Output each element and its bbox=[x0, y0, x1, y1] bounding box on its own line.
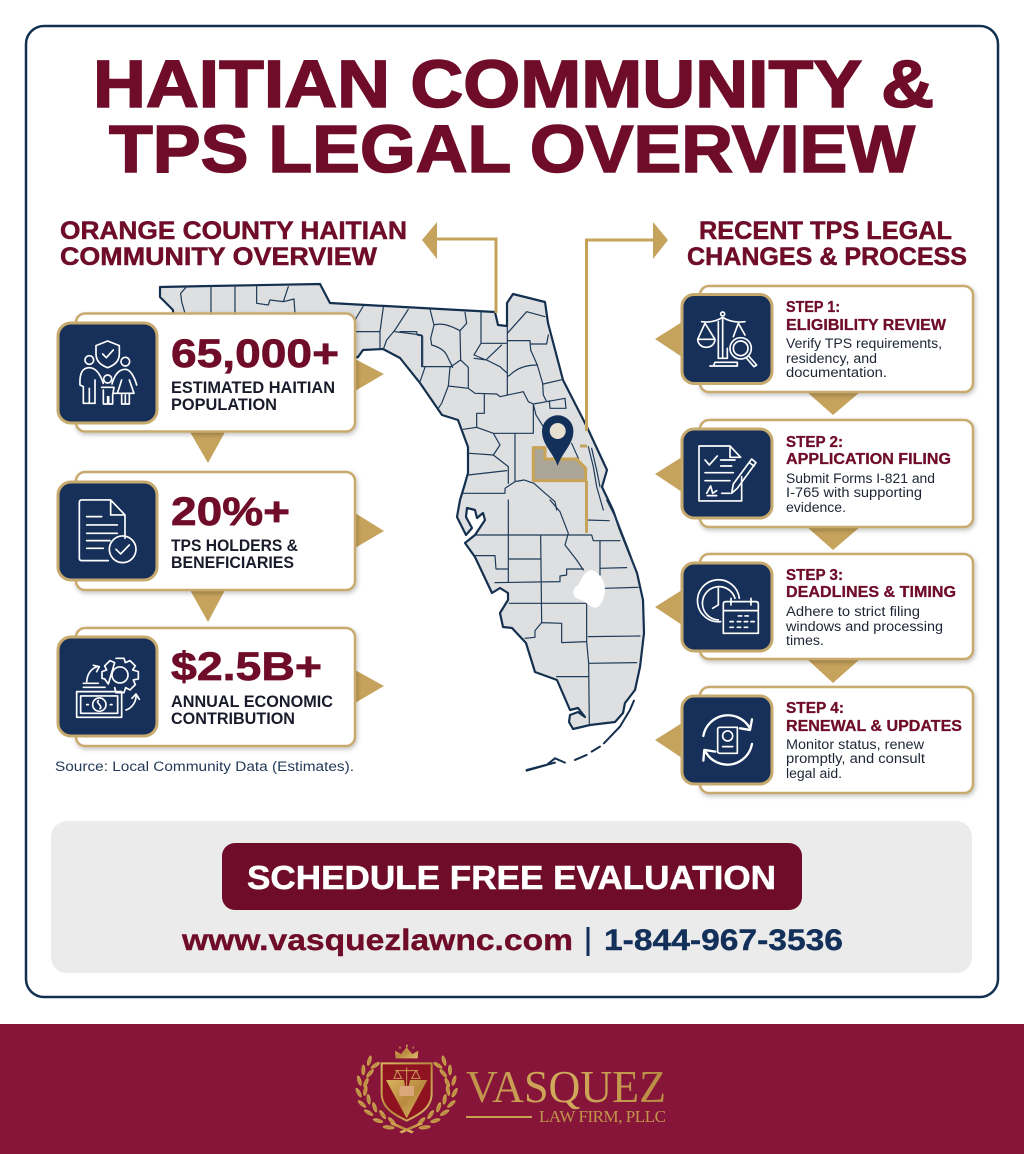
title bbox=[93, 47, 934, 187]
laurel left bbox=[354, 1055, 414, 1133]
logo subtitle: LAW FIRM, PLLC bbox=[539, 1107, 666, 1126]
connector arrow: left bbox=[422, 222, 496, 313]
icon tile bbox=[58, 637, 157, 736]
step description bbox=[786, 471, 935, 515]
card bbox=[700, 554, 973, 659]
icon: family with shield bbox=[80, 341, 137, 404]
contact line bbox=[181, 924, 843, 957]
heading: Orange County overview bbox=[60, 217, 407, 271]
step title: STEP 1: bbox=[786, 299, 840, 316]
panel: call to action bbox=[51, 821, 972, 973]
label: ANNUAL ECONOMIC bbox=[171, 693, 333, 711]
card bbox=[700, 687, 973, 793]
step title bbox=[786, 700, 962, 735]
icon tile bbox=[682, 696, 772, 784]
label: POPULATION bbox=[171, 396, 277, 414]
icon tile bbox=[58, 482, 157, 580]
step title: APPLICATION FILING bbox=[786, 451, 951, 468]
pointer arrow bbox=[655, 723, 682, 758]
value: 65,000+ bbox=[171, 332, 339, 376]
value: $2.5B+ bbox=[171, 645, 322, 689]
panel: step 4 bbox=[655, 687, 973, 793]
step title: STEP 2: bbox=[786, 434, 843, 451]
icon: money and gear bbox=[77, 658, 139, 717]
contact line: www.vasquezlawnc.com bbox=[181, 924, 573, 957]
icon: document with check bbox=[79, 500, 136, 563]
button bbox=[222, 843, 802, 910]
shield V and scales bbox=[386, 1067, 427, 1118]
icon: map pin bbox=[542, 415, 573, 466]
step description: evidence. bbox=[786, 500, 846, 515]
logo rule bbox=[466, 1116, 532, 1118]
heading: Orange County overview: COMMUNITY OVERVIEW bbox=[60, 243, 377, 271]
step title: DEADLINES & TIMING bbox=[786, 584, 956, 601]
south Florida county lines bbox=[475, 500, 640, 723]
step description bbox=[786, 737, 925, 781]
heading: Orange County overview: ORANGE COUNTY HAITIAN bbox=[60, 217, 407, 245]
panel: step 1 bbox=[655, 286, 973, 415]
pointer arrows bbox=[190, 359, 384, 463]
icon: scales and magnifier bbox=[698, 312, 757, 367]
icon tile bbox=[682, 294, 772, 384]
footer band bbox=[0, 1024, 1024, 1154]
card bbox=[76, 314, 355, 432]
card bbox=[76, 472, 355, 590]
source note: Source: Local Community Data (Estimates). bbox=[55, 759, 354, 774]
label bbox=[171, 693, 333, 728]
Florida Keys bbox=[527, 701, 634, 771]
pointer arrow bbox=[355, 670, 384, 703]
step title: STEP 4: bbox=[786, 700, 844, 717]
heading: Recent TPS changes: RECENT TPS LEGAL bbox=[699, 217, 952, 245]
label bbox=[171, 379, 335, 414]
panel: TPS holders stat bbox=[58, 472, 384, 622]
pointer arrows bbox=[655, 457, 860, 550]
panel: population stat bbox=[58, 314, 384, 463]
label bbox=[171, 537, 298, 572]
pointer arrows bbox=[655, 322, 860, 415]
step description: residency, and bbox=[786, 351, 877, 366]
contact line: 1-844-967-3536 bbox=[604, 924, 843, 957]
card bbox=[76, 628, 355, 746]
pointer arrows bbox=[655, 590, 860, 683]
step description: Submit Forms I-821 and bbox=[786, 471, 935, 486]
laurel right bbox=[399, 1055, 459, 1133]
step title: STEP 3: bbox=[786, 567, 843, 584]
step description: Verify TPS requirements, bbox=[786, 336, 942, 351]
map of Florida with county lines bbox=[160, 284, 644, 771]
step title: RENEWAL & UPDATES bbox=[786, 718, 962, 735]
card bbox=[700, 286, 973, 392]
panel: economic contribution stat bbox=[58, 628, 384, 746]
panel: step 2 bbox=[655, 420, 973, 550]
step description: Monitor status, renew bbox=[786, 737, 924, 752]
button: SCHEDULE FREE EVALUATION bbox=[247, 859, 776, 896]
step description: times. bbox=[786, 633, 824, 648]
step title bbox=[786, 567, 956, 601]
heading: Recent TPS changes: CHANGES & PROCESS bbox=[687, 243, 967, 271]
step description: I-765 with supporting bbox=[786, 485, 922, 500]
value: 20%+ bbox=[171, 490, 290, 534]
shield bbox=[382, 1063, 432, 1121]
Orange County highlight bbox=[533, 448, 586, 481]
label: ESTIMATED HAITIAN bbox=[171, 379, 335, 397]
logo wordmark: VASQUEZ bbox=[466, 1061, 666, 1112]
label: BENEFICIARIES bbox=[171, 554, 294, 572]
pointer arrows bbox=[190, 513, 384, 622]
crown bbox=[395, 1045, 418, 1058]
step description: Adhere to strict filing bbox=[786, 604, 920, 619]
icon: clock and calendar bbox=[697, 580, 758, 633]
step description: promptly, and consult bbox=[786, 751, 925, 766]
label: TPS HOLDERS & bbox=[171, 537, 298, 555]
card bbox=[700, 420, 973, 527]
icon tile bbox=[682, 563, 772, 651]
connector arrow: right bbox=[580, 222, 668, 533]
step title bbox=[786, 434, 951, 468]
big bend county lines bbox=[355, 306, 422, 367]
step title bbox=[786, 299, 947, 334]
north Florida county lines bbox=[400, 309, 603, 510]
heading: Recent TPS changes bbox=[687, 217, 967, 271]
step description: documentation. bbox=[786, 365, 887, 380]
step description bbox=[786, 336, 942, 380]
icon: form and pen bbox=[699, 446, 756, 501]
Lake Okeechobee bbox=[573, 570, 605, 608]
step description: windows and processing bbox=[785, 619, 943, 634]
logo: Vasquez Law Firm bbox=[354, 1045, 666, 1133]
step title: ELIGIBILITY REVIEW bbox=[786, 317, 947, 334]
title: TPS LEGAL OVERVIEW bbox=[109, 112, 916, 187]
main framed panel bbox=[26, 26, 998, 997]
logo emblem bbox=[354, 1045, 459, 1133]
title: HAITIAN COMMUNITY & bbox=[93, 47, 934, 122]
label: CONTRIBUTION bbox=[171, 710, 295, 728]
icon: renewal arrows and passport bbox=[703, 715, 752, 765]
step description bbox=[785, 604, 943, 648]
panel: step 3 bbox=[655, 554, 973, 683]
panhandle county lines bbox=[181, 286, 295, 313]
icon tile bbox=[682, 429, 772, 518]
step description: legal aid. bbox=[786, 766, 842, 781]
icon tile bbox=[58, 323, 157, 423]
